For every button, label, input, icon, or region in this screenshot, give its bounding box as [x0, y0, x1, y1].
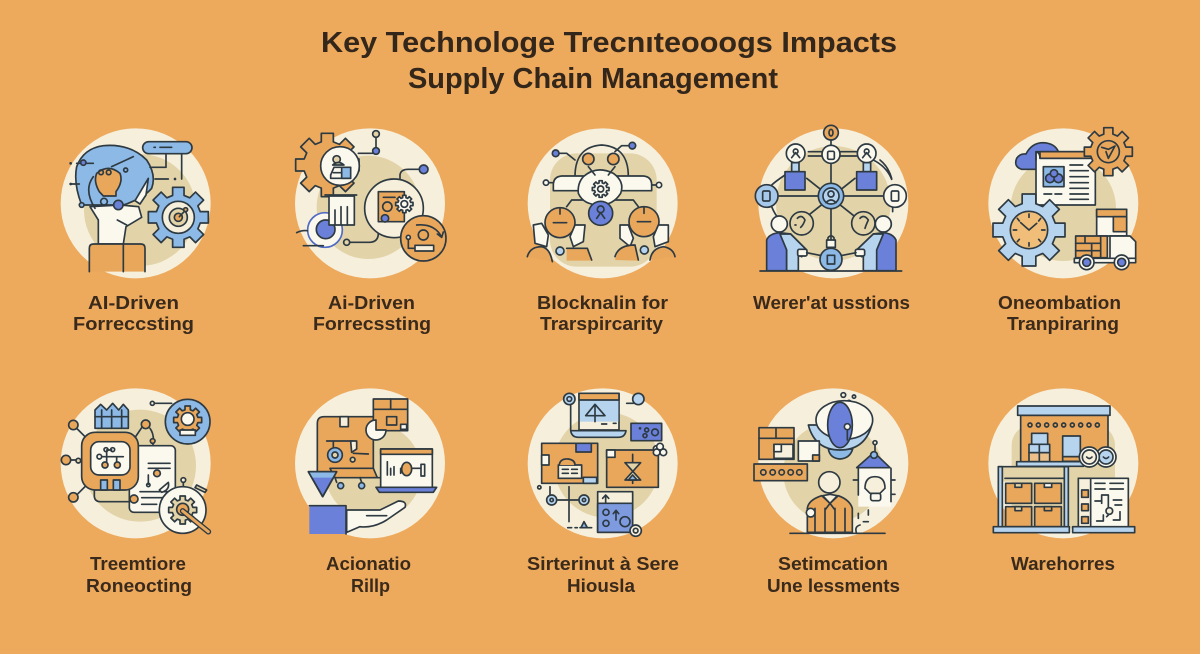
panel: real-time forecasting chip: [61, 388, 211, 596]
label: Rillp: [351, 576, 390, 596]
panel: smart sensor systems: [527, 388, 679, 596]
label: Ai-Driven: [328, 293, 415, 313]
panel: combination, clock and truck: [988, 128, 1138, 334]
label: [73, 293, 194, 334]
label: [313, 293, 431, 334]
label: [998, 293, 1121, 334]
icon: parcel, laptop and open hand: [295, 388, 445, 538]
label: [86, 554, 192, 596]
icon: gears, chart and process nodes: [295, 128, 446, 278]
panel: simulation: [754, 388, 908, 596]
label: [326, 554, 411, 596]
label: Sirterinut à Sere: [527, 554, 679, 574]
panel: AI-driven forecasting (gears): [295, 128, 446, 334]
label: Blocknalin for: [537, 293, 668, 313]
label: AI-Driven: [88, 293, 179, 313]
icon: chip, document and wrench gear: [61, 388, 211, 538]
label: Acionatio: [326, 554, 411, 574]
panel: automation: [295, 388, 445, 596]
label: Forreccsting: [73, 314, 194, 334]
label: Warehorres: [1011, 554, 1115, 574]
title: Key Technologe Trecnıteooogs Impacts: [321, 27, 897, 59]
label: Hiousla: [567, 576, 636, 596]
label: Treemtiore: [90, 554, 186, 574]
label: Tranpiraring: [1007, 314, 1119, 334]
label: Setimcation: [778, 554, 888, 574]
icon: person, shelf and lamp: [754, 388, 908, 538]
label: Werer'at usstions: [753, 293, 910, 313]
label: Une lessments: [767, 576, 900, 596]
label: [527, 554, 679, 596]
label: [767, 554, 900, 596]
title: [321, 27, 897, 95]
panel: blockchain: [527, 128, 678, 334]
icon: blockchain network and people: [527, 128, 678, 278]
panel: warehouses: [988, 388, 1138, 574]
icon: connected network with handshake: [755, 125, 908, 278]
label: Roneocting: [86, 576, 192, 596]
label: Oneombation: [998, 293, 1121, 313]
icon: document, clock gear and truck: [988, 128, 1138, 278]
icon: head with lightbulb and gear: [61, 128, 211, 278]
icon: warehouse shelves and plan: [988, 388, 1138, 538]
label: Trarspircarity: [540, 314, 663, 334]
panel: network users: [753, 125, 910, 313]
icon: laptop, cards and nodes: [528, 388, 678, 538]
label: Forrecssting: [313, 314, 431, 334]
title: Supply Chain Management: [408, 63, 778, 95]
label: [537, 293, 668, 334]
panel: AI-driven forecasting (head): [61, 128, 211, 334]
